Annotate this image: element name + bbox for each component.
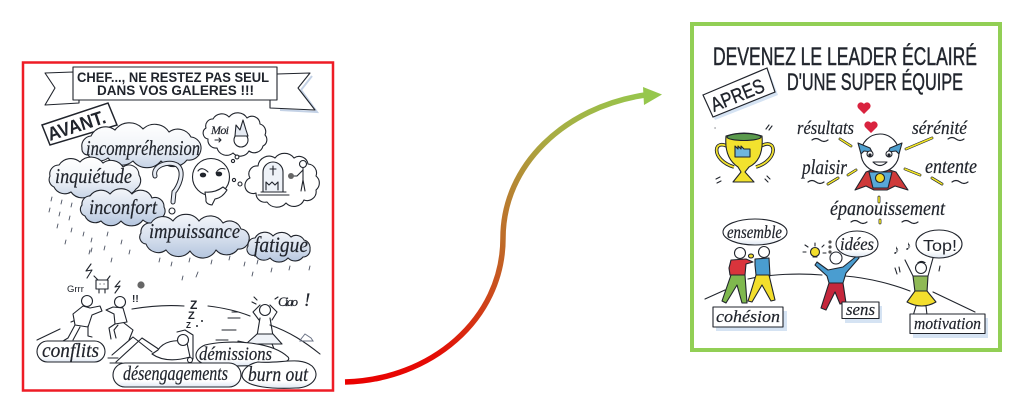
thought cloud: moi bbox=[203, 113, 267, 156]
cloud: inquiétude bbox=[49, 157, 141, 199]
cloud: impuissance bbox=[140, 214, 249, 258]
word: épanouissement: épanouissement bbox=[830, 198, 945, 220]
icon: hearts bbox=[857, 102, 878, 133]
icon: worried face bbox=[192, 155, 242, 205]
figure: sens bbox=[803, 240, 859, 310]
cloud: impuissance: impuissance bbox=[149, 219, 240, 243]
label: cohésion bbox=[713, 307, 787, 331]
bubble: ensemble: ensemble bbox=[727, 222, 782, 242]
figure: sleeping person: Z bbox=[190, 298, 197, 312]
figures: conflicts: Grrr bbox=[67, 284, 84, 295]
bubble: top bbox=[916, 230, 962, 258]
panel: avant bbox=[23, 62, 333, 390]
bubble: top: Top! bbox=[923, 238, 957, 255]
label: sens: sens bbox=[846, 300, 875, 319]
word: résultats: résultats bbox=[797, 118, 854, 139]
cloud: inconfort bbox=[80, 189, 165, 226]
thought cloud: moi: Moi bbox=[210, 123, 229, 137]
label: sens bbox=[842, 300, 882, 323]
rays and squiggles bbox=[808, 138, 968, 224]
figure: sleeping person bbox=[108, 298, 203, 363]
cloud: inquiétude: inquiétude bbox=[55, 164, 132, 188]
figure: sleeping person: Z bbox=[186, 321, 191, 330]
figure: motivation bbox=[893, 238, 940, 325]
banner heading: chef bbox=[45, 67, 317, 112]
word: plaisir: plaisir bbox=[800, 155, 848, 179]
banner heading: chef: DANS VOS GALERES !!! bbox=[97, 83, 254, 98]
rain bbox=[49, 197, 310, 280]
title: leader éclairé bbox=[713, 42, 977, 96]
bubble: ensemble bbox=[723, 219, 787, 245]
cloud: incompréhension: incompréhension bbox=[86, 136, 200, 160]
figure: leaving person: ! bbox=[304, 290, 310, 311]
pill: burn out: burn out bbox=[248, 362, 309, 386]
panel: après bbox=[692, 24, 1000, 350]
pill: démissions: démissions bbox=[199, 344, 272, 365]
cloud: fatigue: fatigue bbox=[254, 232, 308, 257]
figure: sleeping person: Z bbox=[188, 310, 195, 322]
word: sérénité: sérénité bbox=[912, 118, 968, 139]
arrow: avant to après bbox=[345, 87, 662, 382]
sign: avant: AVANT. bbox=[45, 107, 109, 146]
cloud: fatigue bbox=[247, 232, 310, 262]
hill line bbox=[705, 274, 975, 312]
figure: leaving person: Ciao bbox=[278, 294, 298, 309]
banner heading: chef: CHEF..., NE RESTEZ PAS SEUL bbox=[77, 70, 269, 85]
cloud: incompréhension bbox=[82, 123, 201, 168]
thought cloud: tombstone bbox=[245, 153, 319, 207]
figure: motivation: ♪ bbox=[893, 242, 900, 257]
figures: conflicts: !! bbox=[132, 294, 139, 305]
bubble: idées: idées bbox=[840, 234, 874, 254]
bubble: idées bbox=[836, 231, 878, 257]
pill: conflits: conflits bbox=[42, 340, 99, 362]
label: motivation: motivation bbox=[914, 314, 981, 333]
figure: leaving person bbox=[216, 290, 313, 358]
hill line bbox=[37, 306, 320, 354]
icon: trophy bbox=[715, 125, 773, 183]
sign: après: APRES bbox=[708, 75, 768, 117]
pill: désengagements: désengagements bbox=[123, 363, 228, 385]
figure: motivation: ♪ bbox=[905, 238, 912, 253]
cloud: inconfort: inconfort bbox=[89, 195, 158, 219]
figures: cohésion bbox=[722, 246, 775, 303]
question mark bbox=[155, 163, 181, 214]
label: cohésion: cohésion bbox=[716, 307, 780, 326]
figures: conflicts bbox=[63, 264, 145, 341]
word: entente: entente bbox=[925, 156, 977, 178]
icon: super hero bbox=[855, 134, 908, 190]
